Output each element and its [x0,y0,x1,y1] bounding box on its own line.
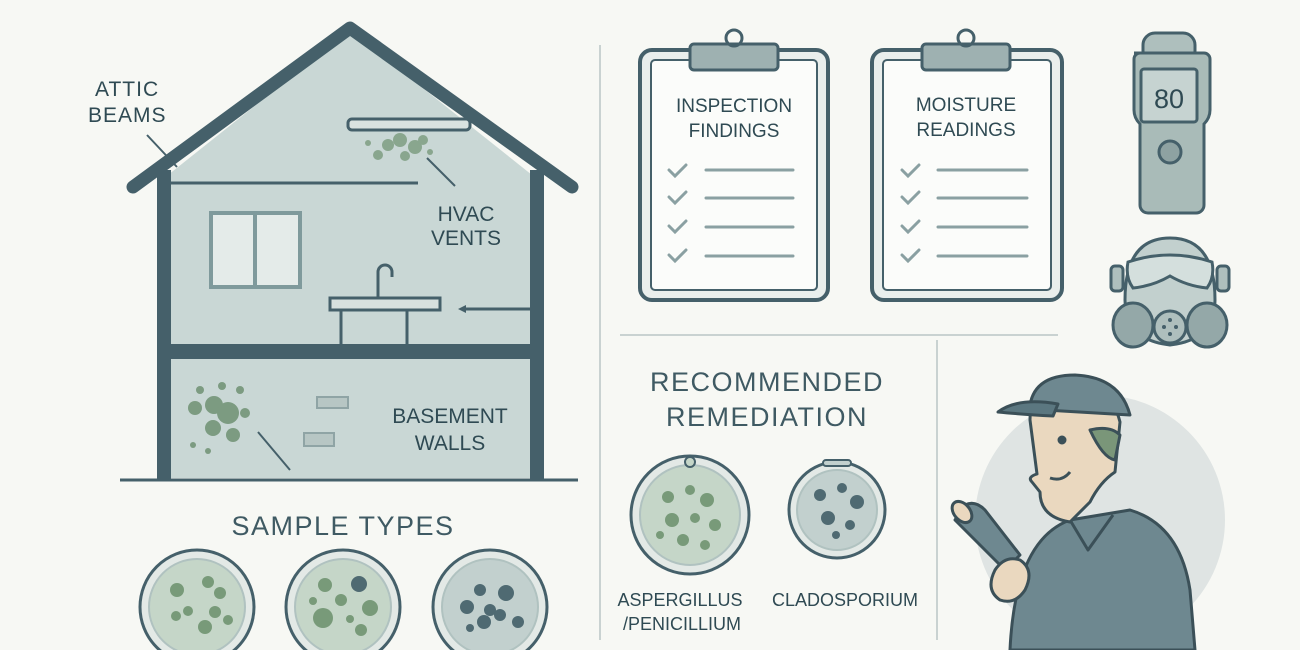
icon: moisture meter [1134,33,1210,213]
mold: hvac [365,133,433,161]
icon: moisture meter: 80 [1154,84,1184,114]
mold: basement [188,382,250,454]
clipboard: inspection findings: FINDINGS [689,121,779,142]
petri dish: cladosporium [789,460,885,558]
sink [330,265,440,345]
window [211,213,300,287]
heading: recommended remediation: RECOMMENDED [650,367,884,397]
label: hvac vents: HVAC [438,203,494,226]
clipboard: inspection findings [640,30,828,300]
label: hvac vents: VENTS [431,227,501,250]
heading: recommended remediation: REMEDIATION [666,402,868,432]
label: attic beams: ATTIC [95,78,159,101]
dividers [600,45,1058,640]
arrow [458,305,530,313]
heading: sample types: SAMPLE TYPES [231,511,455,541]
label: aspergillus/penicillium: ASPERGILLUS [617,590,743,610]
clipboard: moisture readings [872,30,1062,300]
label: basement walls: WALLS [415,432,485,455]
label: basement walls: BASEMENT [392,405,508,428]
vents [304,397,348,446]
clipboard: inspection findings: INSPECTION [676,96,792,117]
label: attic beams: BEAMS [88,104,167,127]
label: cladosporium: CLADOSPORIUM [772,590,918,610]
clipboard: moisture readings: READINGS [916,120,1016,141]
technician illustration [948,375,1225,650]
house [120,28,578,480]
petri dishes: samples [140,550,547,650]
icon: respirator mask [1111,238,1229,347]
clipboard: moisture readings: MOISTURE [916,95,1016,116]
hvac duct [348,119,470,130]
petri dish: aspergillus [631,456,749,574]
label: aspergillus/penicillium: /PENICILLIUM [623,614,741,634]
